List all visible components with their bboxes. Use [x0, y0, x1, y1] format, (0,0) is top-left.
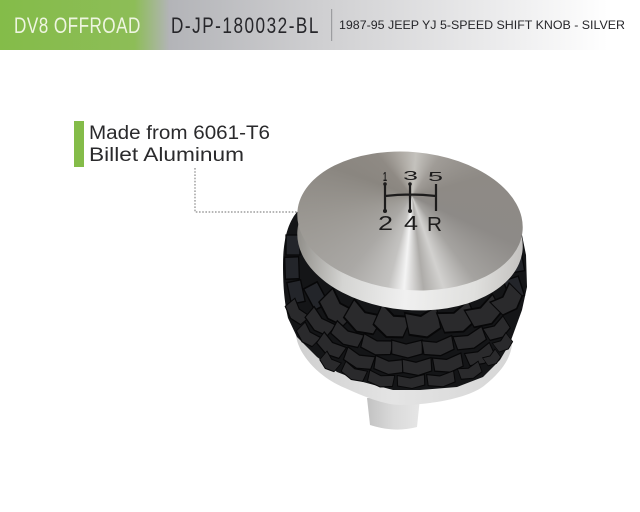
gear shift pattern: 2 — [378, 213, 393, 235]
knob top face — [291, 142, 529, 300]
product title: 1987-95 JEEP YJ 5-SPEED SHIFT KNOB - SILVER — [339, 18, 625, 32]
gear shift pattern: R — [427, 214, 442, 236]
callout text: Made from 6061-T6 — [89, 123, 270, 144]
header band — [0, 0, 625, 50]
gear shift pattern: 5 — [428, 169, 443, 184]
brand name: DV8 OFFROAD — [14, 14, 140, 39]
gear shift pattern: 1 — [383, 169, 387, 184]
knob rim — [291, 160, 529, 320]
callout: material — [74, 121, 297, 213]
stem — [367, 398, 420, 430]
callout text: Billet Aluminum — [89, 145, 244, 166]
gear shift pattern: 4 — [404, 213, 418, 235]
base collar — [296, 335, 512, 405]
part number: D-JP-180032-BL — [171, 14, 318, 39]
shift knob photo — [283, 152, 527, 430]
tire tread — [282, 212, 527, 390]
callout accent bar — [74, 121, 84, 167]
gear shift pattern — [378, 168, 443, 236]
gear shift pattern: 3 — [403, 168, 418, 183]
